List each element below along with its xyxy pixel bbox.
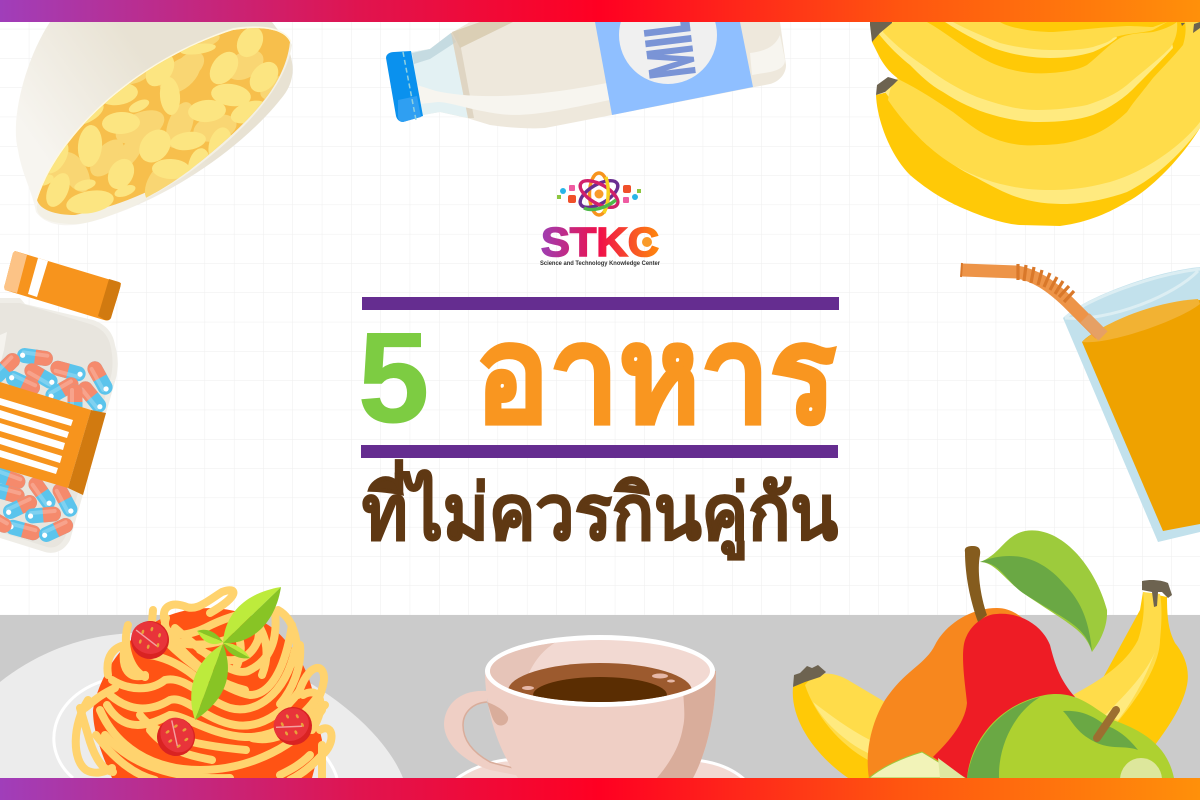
food: orange juice glass	[961, 263, 1200, 542]
logo tagline: Science and Technology Knowledge Center	[540, 261, 661, 267]
food: spaghetti plate	[0, 587, 403, 780]
bottom bar	[0, 778, 1200, 800]
noodles	[76, 590, 332, 780]
straw	[961, 263, 1103, 336]
juice	[1082, 300, 1200, 531]
cup inside and coffee	[485, 635, 715, 707]
rule below title	[361, 445, 838, 458]
middle banana	[872, 22, 1186, 145]
apple slice	[869, 752, 965, 778]
food: fruit group	[793, 530, 1188, 800]
lower banana	[876, 22, 1200, 226]
subtitle: ที่ไม่ควรกินคู่กัน	[362, 459, 838, 560]
left banana	[793, 665, 900, 778]
table surface	[0, 615, 1200, 778]
pills	[0, 347, 115, 544]
milk label	[595, 22, 753, 115]
saucer	[455, 760, 745, 780]
pear stem	[965, 546, 987, 622]
food: coffee cup	[444, 635, 745, 780]
right banana	[1073, 580, 1188, 745]
banana stems	[870, 22, 1200, 95]
apple	[967, 694, 1174, 778]
handle	[444, 691, 530, 778]
upper banana	[927, 22, 1177, 73]
logo atom symbol	[557, 173, 641, 215]
tomatoes	[127, 617, 318, 763]
food: cereal bowl	[16, 22, 294, 225]
jar label	[0, 382, 106, 495]
food: milk bottle	[386, 0, 786, 128]
food: bananas bunch	[870, 22, 1200, 226]
jar cap	[4, 251, 121, 320]
title: 5	[358, 307, 429, 450]
pear	[868, 546, 1075, 778]
leaf	[980, 530, 1107, 652]
sauce	[93, 608, 322, 778]
logo: STKC	[540, 173, 661, 267]
cup body	[485, 671, 716, 778]
logo wordmark: STKC	[541, 219, 659, 265]
top bar	[0, 0, 1200, 22]
title: อาหาร	[475, 299, 836, 451]
bottle cap	[386, 51, 423, 122]
rule above title	[362, 297, 839, 310]
food: vitamin pill jar	[0, 251, 121, 553]
basil	[191, 587, 281, 720]
